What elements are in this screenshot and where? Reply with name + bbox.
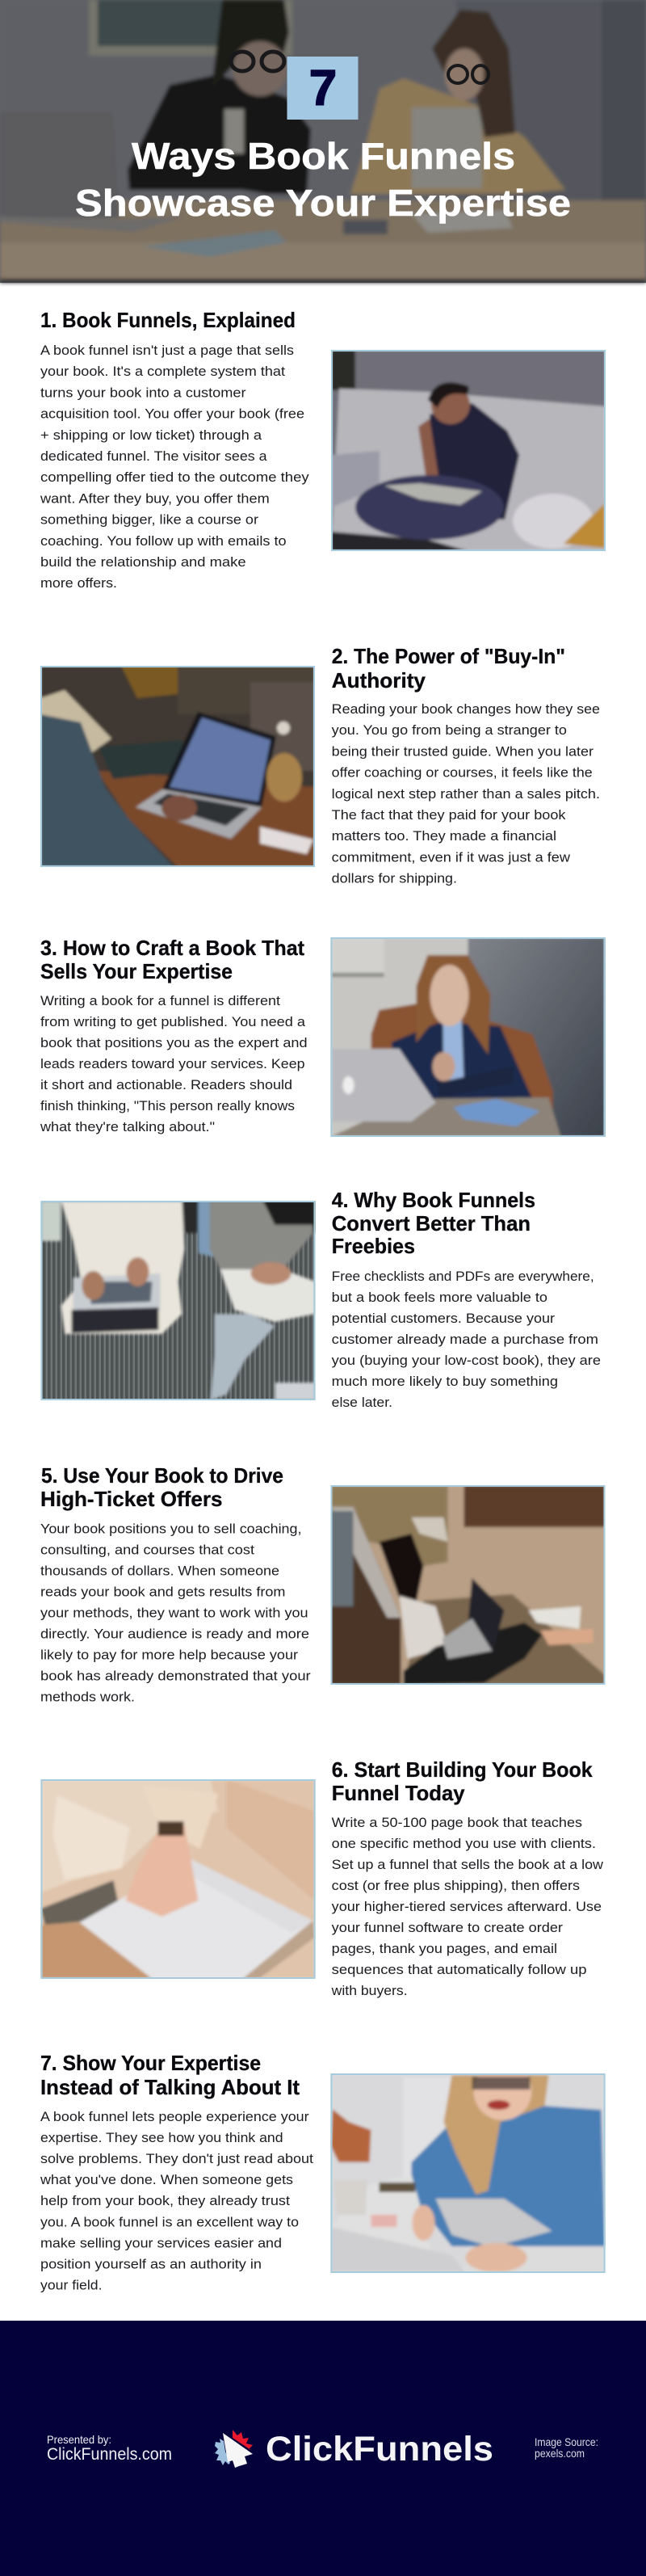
text block 2 <box>332 701 600 886</box>
text block 2: offer coaching or courses, it feels like the <box>332 764 593 781</box>
heading 5: 5. Use Your Book to Drive <box>41 1463 283 1488</box>
heading 6: Funnel Today <box>332 1781 465 1805</box>
text block 4: much more likely to buy something <box>332 1374 558 1389</box>
text block 1: turns your book into a customer <box>40 385 246 401</box>
text block 1 <box>40 343 309 591</box>
photo: man with long hair writing in a notebook <box>331 937 606 1137</box>
panel: section 1 <box>40 308 606 591</box>
text block 3: book that positions you as the expert and <box>40 1035 308 1050</box>
icon: ClickFunnels cursor logo <box>215 2430 253 2468</box>
text block 7: expertise. They see how you think and <box>40 2130 283 2145</box>
text block 7: A book funnel lets people experience your <box>40 2109 309 2124</box>
heading 7 <box>40 2051 300 2099</box>
photo: man reading on a sofa <box>331 350 606 551</box>
main title: Ways Book Funnels <box>132 135 515 177</box>
text block 4: Free checklists and PDFs are everywhere, <box>332 1269 594 1284</box>
text block 7: help from your book, they already trust <box>40 2193 290 2208</box>
presented by credit: ClickFunnels.com <box>47 2445 172 2464</box>
text block 5 <box>40 1521 311 1705</box>
main title <box>75 135 571 224</box>
text block 6: one specific method you use with clients. <box>332 1836 596 1851</box>
text block 1: + shipping or low ticket) through a <box>40 427 262 443</box>
main title: Showcase Your Expertise <box>75 182 571 224</box>
image source credit: Image Source: <box>535 2435 598 2448</box>
photo: smiling woman in a blue sweater with a book <box>331 2062 606 2273</box>
text block 1: something bigger, like a course or <box>40 512 258 527</box>
text block 1: dedicated funnel. The visitor sees a <box>40 448 267 464</box>
heading 3 <box>40 936 304 983</box>
heading 1: 1. Book Funnels, Explained <box>40 308 296 332</box>
text block 3 <box>40 993 308 1134</box>
text block 2: matters too. They made a financial <box>332 828 556 844</box>
text block 2: you. You go from being a stranger to <box>332 722 567 738</box>
text block 3: Writing a book for a funnel is different <box>40 993 280 1008</box>
heading 2: Authority <box>332 668 426 692</box>
panel: section 6 <box>40 1757 604 1998</box>
photo: hand resting on an open book <box>40 1779 315 1979</box>
text block 4: you (buying your low-cost book), they are <box>332 1353 601 1368</box>
heading 7: Instead of Talking About It <box>40 2075 300 2099</box>
text block 3: from writing to get published. You need a <box>40 1014 306 1029</box>
text block 2: logical next step rather than a sales pitch. <box>332 786 600 802</box>
text block 6: pages, thank you pages, and email <box>332 1941 557 1956</box>
number badge: 7 <box>309 61 337 116</box>
text block 6: sequences that automatically follow up <box>332 1962 586 1977</box>
image source credit: pexels.com <box>535 2447 585 2460</box>
text block 4: but a book feels more valuable to <box>332 1290 547 1305</box>
heading 6: 6. Start Building Your Book <box>332 1757 593 1782</box>
text block 5: Your book positions you to sell coaching, <box>40 1521 302 1537</box>
photo: woman on the floor with a laptop <box>331 1485 606 1685</box>
text block 5: directly. Your audience is ready and more <box>40 1626 309 1642</box>
text block 4: customer already made a purchase from <box>332 1332 598 1347</box>
panel: section 3 <box>40 936 606 1137</box>
text block 5: reads your book and gets results from <box>40 1584 286 1600</box>
text block 2: dollars for shipping. <box>332 871 457 886</box>
ClickFunnels wordmark: ClickFunnels <box>266 2430 493 2469</box>
panel: section 5 <box>40 1463 606 1705</box>
header panel <box>0 0 646 283</box>
text block 3: what they're talking about." <box>40 1119 215 1134</box>
heading 4 <box>332 1188 535 1258</box>
heading 6 <box>332 1757 593 1805</box>
text block 2: The fact that they paid for your book <box>332 807 566 823</box>
heading 3: Sells Your Expertise <box>40 959 233 983</box>
heading 5 <box>40 1463 283 1511</box>
text block 1: more offers. <box>40 575 117 591</box>
text block 7: your field. <box>40 2277 102 2293</box>
heading 7: 7. Show Your Expertise <box>40 2051 261 2075</box>
text block 5: thousands of dollars. When someone <box>40 1563 279 1579</box>
heading 2: 2. The Power of "Buy-In" <box>332 644 565 668</box>
heading 4: Convert Better Than <box>332 1211 531 1235</box>
text block 4: else later. <box>332 1395 392 1410</box>
heading 2 <box>332 644 565 692</box>
text block 1: want. After they buy, you offer them <box>40 491 270 506</box>
text block 7: position yourself as an authority in <box>40 2256 262 2272</box>
number badge <box>287 57 359 120</box>
text block 1: compelling offer tied to the outcome they <box>40 469 309 485</box>
text block 3: leads readers toward your services. Keep <box>40 1056 305 1071</box>
text block 5: your methods, they want to work with you <box>40 1605 308 1621</box>
text block 1: coaching. You follow up with emails to <box>40 533 287 549</box>
text block 7: solve problems. They don't just read about <box>40 2151 313 2166</box>
text block 1: your book. It's a complete system that <box>40 364 285 379</box>
text block 3: finish thinking, "This person really knows <box>40 1098 295 1113</box>
text block 1: A book funnel isn't just a page that sells <box>40 343 294 358</box>
text block 2: Reading your book changes how they see <box>332 701 600 717</box>
heading 3: 3. How to Craft a Book That <box>40 936 304 960</box>
photo: person using a laptop at a wooden table <box>40 666 315 867</box>
text block 6: with buyers. <box>331 1983 408 1998</box>
text block 6: Write a 50-100 page book that teaches <box>332 1815 582 1830</box>
header photo: two women working at a desk <box>0 0 646 283</box>
text block 5: likely to pay for more help because your <box>40 1647 298 1663</box>
presented by credit <box>47 2433 172 2464</box>
text block 7: make selling your services easier and <box>40 2235 282 2251</box>
text block 2: commitment, even if it was just a few <box>332 850 571 865</box>
heading 4: Freebies <box>332 1234 415 1258</box>
panel: section 2 <box>40 644 600 886</box>
text block 6: your higher-tiered services afterward. Use <box>332 1899 602 1914</box>
text block 6: cost (or free plus shipping), then offers <box>332 1878 580 1893</box>
text block 1: acquisition tool. You offer your book (free <box>40 406 304 422</box>
text block 6: your funnel software to create order <box>332 1920 563 1935</box>
presented by credit: Presented by: <box>47 2433 111 2446</box>
text block 7 <box>40 2109 313 2293</box>
text block 5: methods work. <box>40 1689 135 1705</box>
text block 2: being their trusted guide. When you later <box>332 743 594 760</box>
text block 6: Set up a funnel that sells the book at a low <box>332 1857 604 1872</box>
heading 4: 4. Why Book Funnels <box>332 1188 535 1212</box>
text block 7: you. A book funnel is an excellent way to <box>40 2214 299 2230</box>
image source credit <box>535 2435 598 2460</box>
footer panel <box>0 2321 646 2576</box>
photo: two people on a striped floor with laptop and book <box>40 1201 315 1400</box>
heading 5: High-Ticket Offers <box>40 1487 223 1511</box>
text block 7: what you've done. When someone gets <box>40 2172 293 2187</box>
text block 6 <box>331 1815 604 1998</box>
text block 4 <box>332 1269 601 1410</box>
text block 4: potential customers. Because your <box>332 1311 555 1326</box>
text block 3: it short and actionable. Readers should <box>40 1077 292 1092</box>
panel: section 4 <box>40 1188 601 1410</box>
text block 5: consulting, and courses that cost <box>40 1542 254 1558</box>
text block 1: build the relationship and make <box>40 554 246 570</box>
panel: section 7 <box>40 2051 606 2293</box>
text block 5: book has already demonstrated that your <box>40 1668 311 1684</box>
